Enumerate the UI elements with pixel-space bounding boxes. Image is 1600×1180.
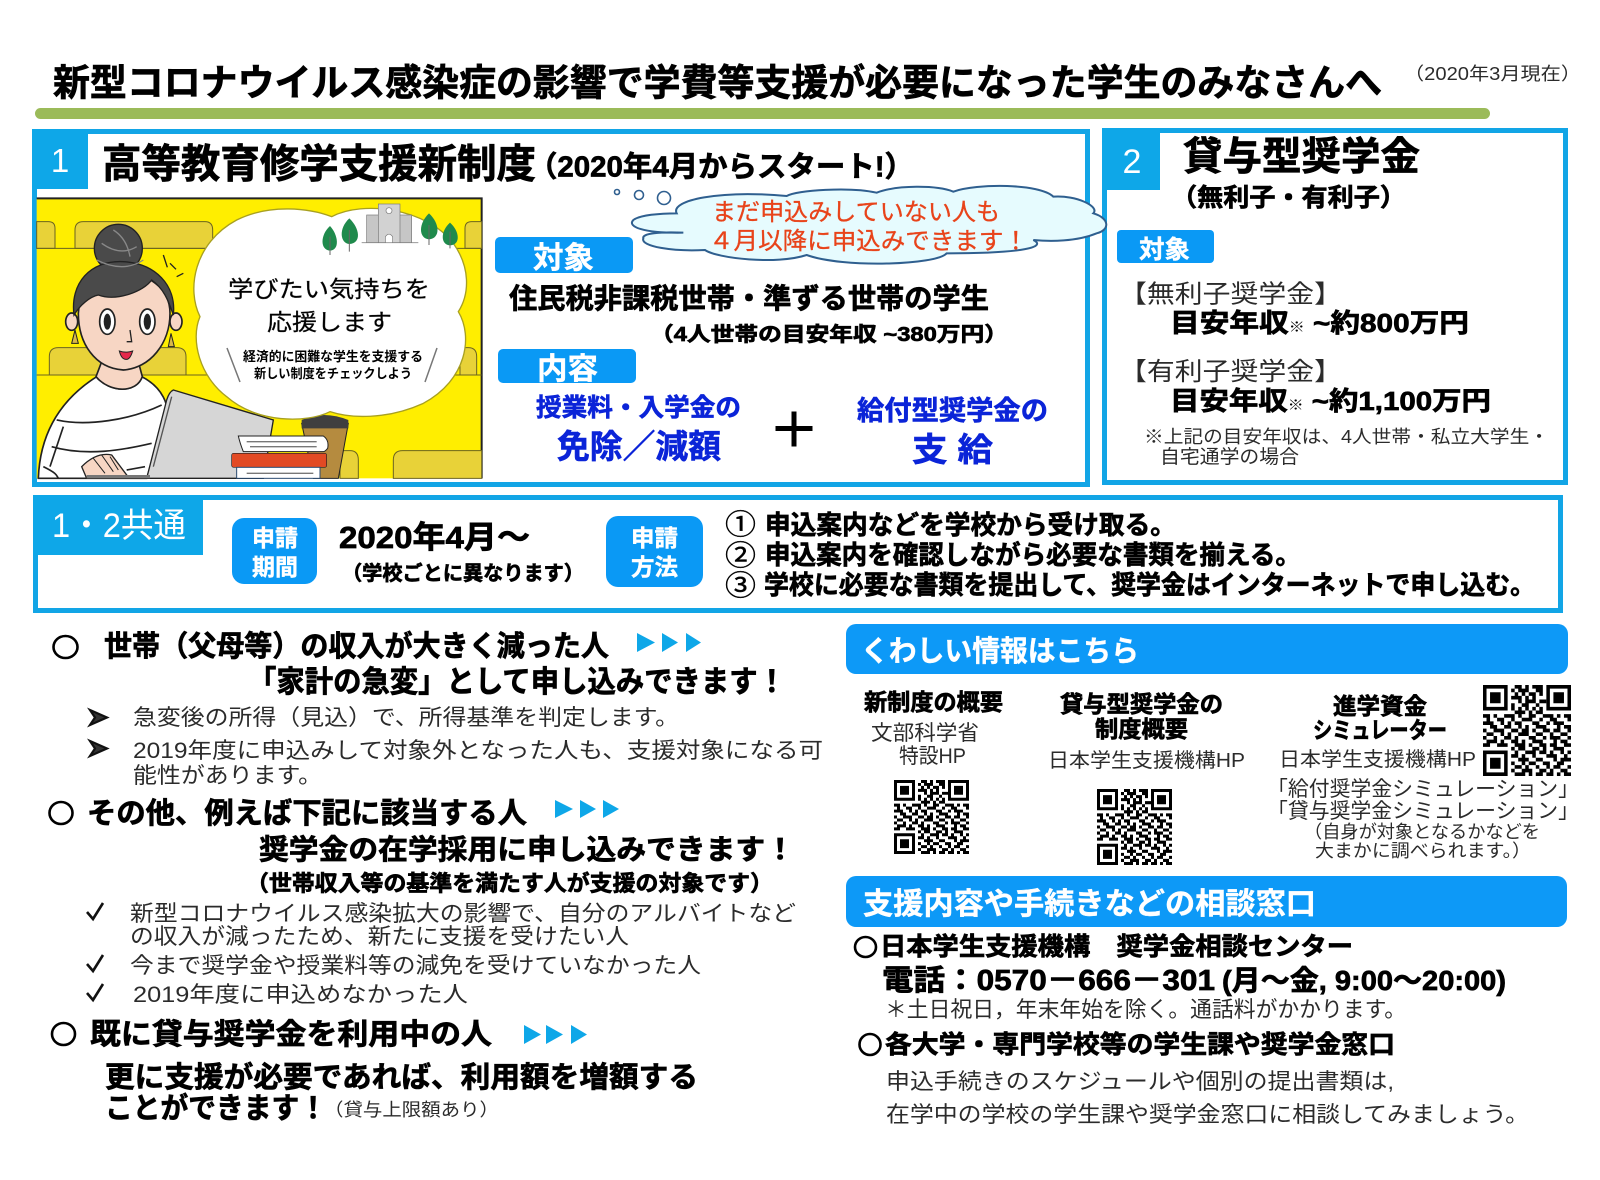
application period: （学校ごとに異なります） xyxy=(342,561,584,585)
header bar xyxy=(846,624,1568,674)
callout cloud xyxy=(614,186,1106,264)
application steps: ① xyxy=(725,509,756,540)
link: loan scholarship overview: 制度概要 xyxy=(1095,716,1188,742)
bubble message: 学びたい気持ちを xyxy=(228,276,430,302)
content: tuition exemption xyxy=(536,394,741,465)
period badge: 申請 xyxy=(252,525,298,551)
application period: 2020年4月～ xyxy=(339,520,530,555)
emphasis note: （世帯収入等の基準を満たす人が支援の対象です） xyxy=(246,871,773,896)
application steps: ② xyxy=(725,540,756,571)
section: other eligible students xyxy=(50,797,796,1007)
bullet circle xyxy=(54,636,78,658)
application period xyxy=(339,520,584,585)
check mark xyxy=(87,984,103,1000)
bullet xyxy=(90,710,107,725)
school desk: 在学中の学校の学生課や奨学金窓口に相談してみましょう。 xyxy=(886,1102,1529,1127)
emphasis line: 奨学金の在学採用に申し込みできます！ xyxy=(259,834,795,865)
interest-free: 目安年収 ※ ~約800万円 xyxy=(1170,308,1469,338)
check text: 2019年度に申込めなかった人 xyxy=(133,982,468,1007)
target badge: 対象 xyxy=(533,242,594,275)
link: loan scholarship overview: 貸与型奨学金の xyxy=(1060,691,1223,717)
school desk: 申込手続きのスケジュールや個別の提出書類は, xyxy=(886,1069,1394,1094)
content badge: 内容 xyxy=(537,353,598,386)
title: 新型コロナウイルス感染症の影響で学費等支援が必要になった学生のみなさんへ xyxy=(53,62,1382,104)
check text: 今まで奨学金や授業料等の減免を受けていなかった人 xyxy=(130,953,701,978)
callout cloud: まだ申込みしていない人も xyxy=(712,199,1000,226)
footnote: ※上記の目安年収は、4人世帯・私立大学生・ xyxy=(1144,427,1549,447)
panel 1 heading: 高等教育修学支援新制度 xyxy=(102,142,536,186)
check mark xyxy=(87,903,103,919)
panel frame xyxy=(36,498,1560,610)
bullet circle xyxy=(860,1034,880,1055)
bullet circle xyxy=(52,1023,75,1045)
interest-bearing: 【有利子奨学金】 xyxy=(1119,358,1342,386)
section heading: 既に貸与奨学金を利用中の人 xyxy=(90,1018,492,1051)
illustration: student with speech bubble: 新しい制度をチェックしよう xyxy=(254,366,412,381)
period badge: 期間 xyxy=(252,554,298,580)
bullet text xyxy=(133,738,823,788)
illustration: student with speech bubble: 応援します xyxy=(267,309,392,335)
panel: common to 1 and 2 xyxy=(33,495,1560,610)
header bar: 支援内容や手続きなどの相談窓口 xyxy=(863,888,1316,921)
content: tuition exemption: 授業料・入学金の xyxy=(536,394,741,422)
check text: 新型コロナウイルス感染拡大の影響で、自分のアルバイトなど xyxy=(130,901,796,926)
panel: more information xyxy=(846,624,1579,865)
JASSO desk: (月～金, 9:00～20:00) xyxy=(1222,965,1506,996)
bullet circle xyxy=(50,802,72,824)
content badge xyxy=(498,349,636,386)
number tab 1 xyxy=(32,129,88,189)
bullet circle xyxy=(855,937,876,957)
emphasis lines: 更に支援が必要であれば、利用額を増額する xyxy=(105,1060,698,1094)
common tab: 1・2共通 xyxy=(52,507,186,545)
link: funding simulator: （自身が対象となるかなどを xyxy=(1304,822,1540,842)
link: loan scholarship overview xyxy=(1048,691,1245,772)
emphasis lines xyxy=(105,1060,698,1125)
section: household income dropped xyxy=(54,629,823,788)
panel 2 heading: 貸与型奨学金 xyxy=(1183,136,1420,179)
link: new system overview: 文部科学省 xyxy=(871,722,979,745)
JASSO desk: 電話：0570－666－301 xyxy=(882,964,1215,997)
link: new system overview: 特設HP xyxy=(899,745,966,768)
panel 2 subheading: （無利子・有利子） xyxy=(1171,184,1406,212)
bullet text: 2019年度に申込みして対象外となった人も、支援対象になる可 xyxy=(133,738,823,763)
panel: 1 new support system xyxy=(32,129,1088,484)
application steps xyxy=(725,509,1535,601)
footnote xyxy=(1144,427,1549,468)
application steps: 申込案内などを学校から受け取る。 xyxy=(765,510,1176,540)
limit note: （貸与上限額あり） xyxy=(324,1100,499,1120)
target badge: 対象 xyxy=(1139,236,1190,264)
application steps: ③ xyxy=(725,570,756,601)
section heading: 世帯（父母等）の収入が大きく減った人 xyxy=(104,629,609,663)
header bar xyxy=(846,876,1567,927)
link: new system overview xyxy=(864,689,1003,768)
panel: 2 loan scholarship xyxy=(1102,128,1566,482)
panel frame xyxy=(1104,130,1566,482)
emphasis line: 「家計の急変」として申し込みできます！ xyxy=(248,666,786,699)
school desk xyxy=(885,1031,1529,1127)
link: funding simulator xyxy=(1267,693,1579,861)
link: funding simulator: シミュレーター xyxy=(1313,717,1447,743)
bullet xyxy=(90,741,107,756)
link: funding simulator: 大まかに調べられます。） xyxy=(1315,841,1531,861)
content: grant scholarship: 給付型奨学金の xyxy=(857,396,1048,426)
callout cloud: ４月以降に申込みできます！ xyxy=(709,228,1028,255)
interest-free: 【無利子奨学金】 xyxy=(1119,280,1342,308)
arrows xyxy=(555,800,619,818)
link: loan scholarship overview: 日本学生支援機構HP xyxy=(1048,749,1245,772)
JASSO desk xyxy=(880,933,1506,1022)
method badge: 方法 xyxy=(631,554,678,580)
check text: の収入が減ったため、新たに支援を受けたい人 xyxy=(130,924,629,949)
bullet text: 能性があります。 xyxy=(133,763,322,788)
emphasis lines: ことができます！ xyxy=(105,1091,327,1125)
content: grant scholarship xyxy=(857,396,1048,468)
link: funding simulator: 「貸与奨学金シミュレーション」 xyxy=(1267,800,1579,823)
target badge xyxy=(495,237,633,275)
header bar: くわしい情報はこちら xyxy=(861,635,1139,668)
JASSO desk: ＊土日祝日，年末年始を除く。通話料がかかります。 xyxy=(885,997,1406,1022)
QR code xyxy=(1097,789,1172,865)
income note: （4人世帯の目安年収 ~380万円） xyxy=(650,323,1008,346)
panel frame xyxy=(34,132,1088,484)
number tab 2 xyxy=(1102,128,1160,190)
arrows xyxy=(637,633,701,652)
target description: 住民税非課税世帯・準ずる世帯の学生 xyxy=(509,283,989,314)
panel: consultation desks xyxy=(846,876,1567,1127)
plus sign xyxy=(776,412,812,446)
link: funding simulator: 進学資金 xyxy=(1333,693,1427,719)
QR code xyxy=(1483,685,1571,776)
section: already using loan xyxy=(52,1018,698,1125)
number tab 1: 1 xyxy=(51,142,69,179)
application steps: 学校に必要な書類を提出して、奨学金はインターネットで申し込む。 xyxy=(764,570,1535,600)
target badge xyxy=(1117,230,1214,264)
bullet text: 急変後の所得（見込）で、所得基準を判定します。 xyxy=(133,705,679,730)
JASSO desk: 日本学生支援機構 奨学金相談センター xyxy=(880,933,1353,961)
arrows xyxy=(524,1025,587,1044)
application steps: 申込案内を確認しながら必要な書類を揃える。 xyxy=(765,540,1301,570)
content: grant scholarship: 支 給 xyxy=(912,431,993,468)
illustration: student with speech bubble: 経済的に困難な学生を支援する xyxy=(243,349,423,364)
number tab 2: 2 xyxy=(1123,143,1141,181)
method badge xyxy=(606,516,703,587)
illustration: student with speech bubble xyxy=(37,198,482,478)
link: funding simulator: 日本学生支援機構HP xyxy=(1279,748,1476,771)
section heading: その他、例えば下記に該当する人 xyxy=(87,797,527,830)
footnote: 自宅通学の場合 xyxy=(1160,446,1299,468)
date note: （2020年3月現在） xyxy=(1404,64,1581,84)
link: new system overview: 新制度の概要 xyxy=(864,689,1003,715)
method badge: 申請 xyxy=(631,525,678,551)
period badge xyxy=(232,518,317,584)
interest-bearing: 目安年収 ※ ~約1,100万円 xyxy=(1170,386,1491,416)
check text xyxy=(130,901,796,949)
green title rule xyxy=(35,108,1490,119)
check mark xyxy=(87,955,103,971)
common tab xyxy=(33,495,203,555)
link: funding simulator: 「給付奨学金シミュレーション」 xyxy=(1267,778,1579,801)
interest-free xyxy=(1119,280,1469,338)
interest-bearing xyxy=(1119,358,1491,416)
school desk: 各大学・専門学校等の学生課や奨学金窓口 xyxy=(885,1031,1395,1059)
content: tuition exemption: 免除／減額 xyxy=(557,428,721,465)
panel 1 start date: （2020年4月からスタート!） xyxy=(528,150,914,184)
QR code xyxy=(894,780,969,854)
